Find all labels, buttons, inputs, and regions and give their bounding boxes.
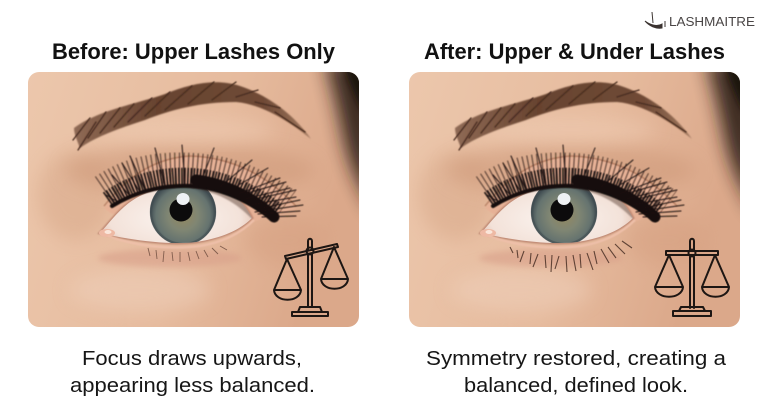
logo — [645, 12, 755, 29]
heading: before: Before: Upper Lashes Only — [52, 39, 336, 64]
icon: tilted balance scale — [274, 239, 348, 316]
panel: before photo — [28, 60, 375, 327]
caption: before: appearing less balanced. — [70, 374, 315, 397]
icon: lash logo mark — [645, 12, 665, 28]
lower lashes: defined under lashes — [510, 241, 632, 272]
caption: after — [426, 347, 727, 397]
panel: after photo — [409, 60, 756, 327]
heading: after: After: Upper & Under Lashes — [424, 39, 725, 64]
caption: before — [70, 347, 315, 397]
caption: before: Focus draws upwards, — [82, 347, 302, 370]
caption: after: balanced, defined look. — [464, 374, 688, 397]
caption: after: Symmetry restored, creating a — [426, 347, 727, 370]
photo: eye with upper and under lashes — [409, 60, 756, 327]
logo wordmark: LASHMAITRE — [669, 14, 755, 29]
photo: eye with upper lashes only — [28, 60, 375, 327]
icon: level balance scale — [655, 239, 729, 316]
lower lashes: sparse natural — [148, 246, 227, 262]
